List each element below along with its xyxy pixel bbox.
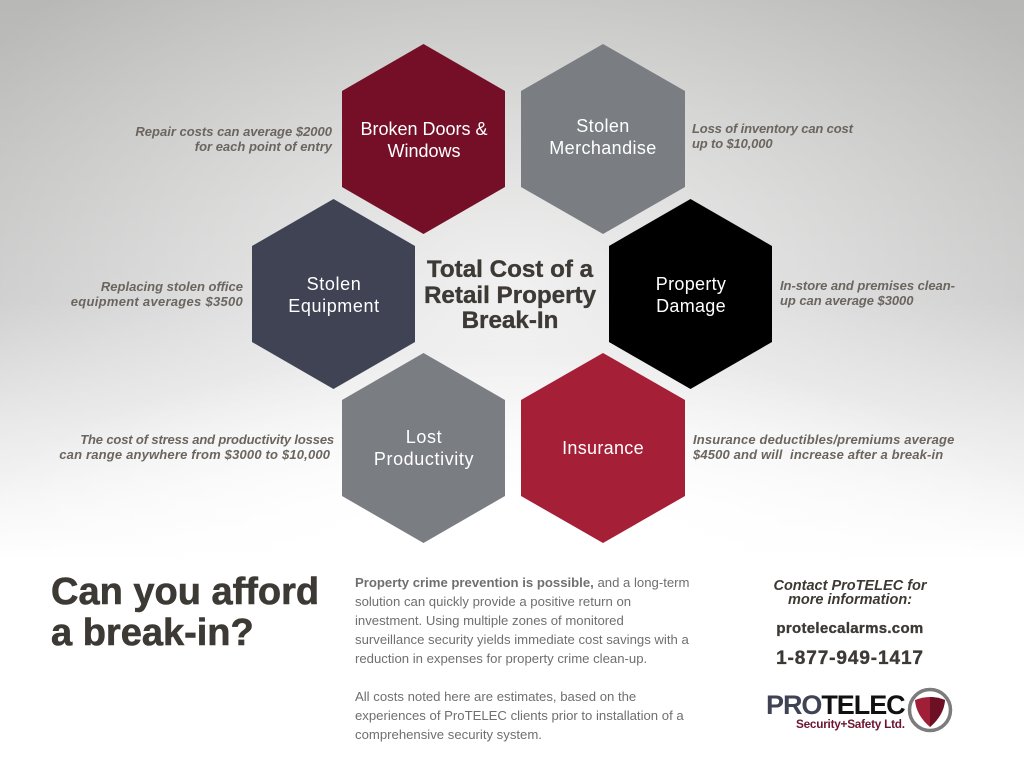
- title: [424, 256, 596, 334]
- hexagon label: lost productivity: [374, 427, 474, 469]
- title: Total Cost of a: [427, 256, 593, 283]
- note: clean-up: up can average $3000: [780, 293, 913, 308]
- body text: surveillance security yields immediate cost savings with a: [355, 632, 689, 647]
- note: repair costs: Repair costs can average $2000: [135, 124, 332, 139]
- note: inventory: [692, 121, 854, 151]
- logo wordmark: PROTELEC: [766, 690, 905, 720]
- hexagon label: lost productivity: Productivity: [374, 449, 474, 469]
- body text: reduction in expenses for property crime clean-up.: [355, 651, 647, 666]
- body text: experiences of ProTELEC clients prior to installation of a: [355, 708, 684, 723]
- hexagon label: stolen equipment: Equipment: [288, 296, 380, 316]
- note: insurance: [693, 432, 954, 462]
- note: inventory: Loss of inventory can cost: [692, 121, 853, 136]
- hexagon label: property damage: Damage: [656, 296, 726, 316]
- note: inventory: up to $10,000: [692, 136, 772, 151]
- logo tagline: Security+Safety Ltd.: [796, 717, 905, 731]
- hexagon: stolen equipment: [252, 199, 415, 389]
- note: clean-up: [780, 278, 955, 308]
- logo: [766, 688, 952, 732]
- hexagon: stolen merchandise: [521, 44, 685, 234]
- contact prompt: [773, 578, 928, 608]
- body text: comprehensive security system.: [355, 727, 542, 742]
- hexagon label: insurance: Insurance: [562, 438, 644, 458]
- hexagon label: stolen merchandise: Merchandise: [549, 138, 657, 158]
- website: protelecalarms.com: [776, 620, 924, 637]
- contact prompt: more information:: [788, 592, 912, 608]
- body text: investment. Using multiple zones of monitored: [355, 613, 624, 628]
- heading: can you afford: Can you afford: [51, 571, 319, 613]
- body text: solution can quickly provide a positive return on: [355, 594, 631, 609]
- heading: can you afford: [51, 571, 319, 654]
- note: repair costs: for each point of entry: [195, 139, 332, 154]
- hexagon label: stolen equipment: Stolen: [307, 274, 361, 294]
- note: office equipment: [71, 279, 243, 309]
- hexagon: insurance: [521, 353, 685, 543]
- contact prompt: Contact ProTELEC for: [773, 578, 927, 594]
- title: Retail Property: [424, 282, 596, 308]
- note: insurance: Insurance deductibles/premiums average: [693, 432, 954, 447]
- hexagon label: stolen merchandise: Stolen: [576, 116, 630, 136]
- hexagon label: property damage: [656, 274, 726, 316]
- note: productivity: [59, 432, 334, 462]
- body text: [355, 575, 689, 742]
- hexagon label: lost productivity: Lost: [406, 427, 442, 447]
- hexagon: property damage: [609, 199, 772, 389]
- hexagon label: property damage: Property: [656, 274, 726, 294]
- note: repair costs: [135, 124, 332, 154]
- hexagon label: broken doors: Windows: [387, 141, 461, 161]
- title: Break-In: [462, 307, 558, 334]
- hexagon label: stolen equipment: [288, 274, 380, 316]
- hexagon: lost productivity: [342, 353, 505, 543]
- note: office equipment: Replacing stolen office: [101, 279, 243, 294]
- phone: 1-877-949-1417: [776, 648, 924, 669]
- body text: Property crime prevention is possible, and a long-term: [355, 575, 689, 590]
- hexagon label: broken doors: Broken Doors &: [360, 119, 488, 139]
- note: productivity: The cost of stress and productivity losses: [80, 432, 334, 447]
- note: productivity: can range anywhere from $3000 to $10,000: [59, 447, 330, 462]
- hexagon label: broken doors: [360, 119, 488, 161]
- hexagon: broken doors and windows: [342, 44, 505, 234]
- note: clean-up: In-store and premises clean-: [780, 278, 955, 293]
- note: office equipment: equipment averages $3500: [71, 294, 243, 309]
- body text: All costs noted here are estimates, based on the: [355, 689, 636, 704]
- note: insurance: $4500 and will increase after a break-in: [693, 447, 943, 462]
- heading: can you afford: a break-in?: [51, 612, 254, 654]
- hexagon label: stolen merchandise: [549, 116, 657, 158]
- logo emblem: [908, 688, 952, 732]
